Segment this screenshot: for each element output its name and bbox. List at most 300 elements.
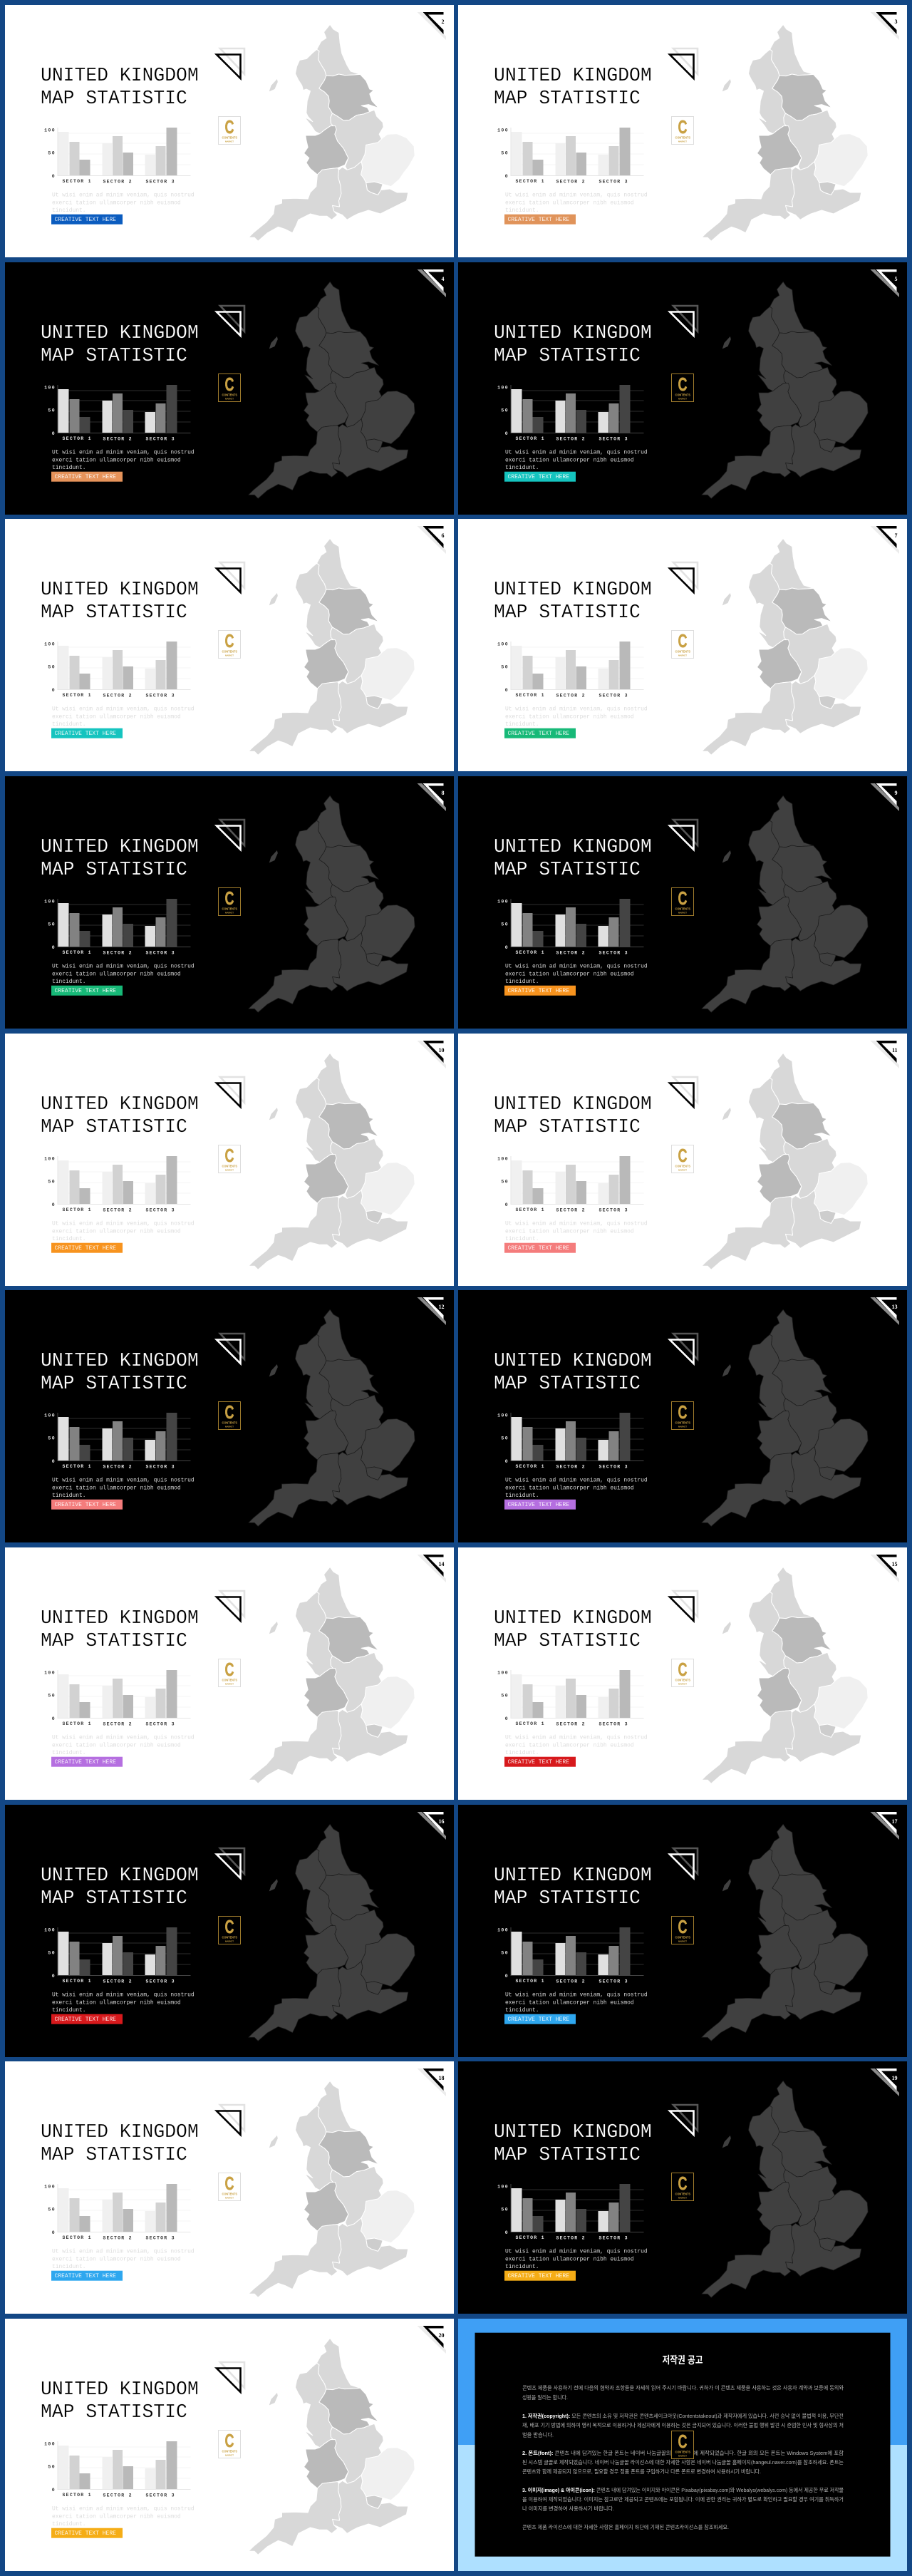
bar chart: SECTOR 2 <box>556 951 585 955</box>
bar chart <box>497 1927 644 1984</box>
text block <box>51 1735 194 1756</box>
title <box>494 1350 652 1394</box>
text block: tincidunt. <box>51 1236 86 1242</box>
button <box>51 215 123 225</box>
notice body text: 3. 이미지(image) & 아이콘(icon): 콘텐츠 내에 담겨있는 이미지와 아이콘은 Pixabay(pixabay.com)와 Webalys(webalys.com) 등에서 제공한 무료 저작물 <box>522 2487 844 2493</box>
text block <box>51 449 194 471</box>
icon: triangles <box>670 1591 698 1621</box>
bar chart: 0 <box>505 431 509 436</box>
icon: triangles <box>217 306 244 336</box>
bar chart: 0 <box>51 174 56 179</box>
bar chart: SECTOR 3 <box>145 1722 174 1726</box>
title: UNITED KINGDOM <box>494 322 652 344</box>
icon: triangles <box>217 1077 244 1107</box>
title: MAP STATISTIC <box>40 88 187 109</box>
bar chart: SECTOR 3 <box>598 1207 628 1212</box>
bar chart: SECTOR 3 <box>145 2236 174 2241</box>
map of England regions <box>702 282 868 498</box>
text block: Ut wisi enim ad minim veniam, quis nostrud <box>51 1992 194 1998</box>
bar chart: 100 <box>497 128 509 133</box>
icon: triangles <box>217 562 244 592</box>
text block <box>51 2506 194 2528</box>
corner marker with page number <box>871 1812 899 1840</box>
text block <box>51 964 194 985</box>
text block: Ut wisi enim ad minim veniam, quis nostrud <box>51 192 194 198</box>
text block: Ut wisi enim ad minim veniam, quis nostrud <box>505 449 648 455</box>
corner marker with page number: 5 <box>895 276 898 282</box>
bar chart: SECTOR 1 <box>516 1721 544 1726</box>
icon: contents logo <box>218 1916 240 1944</box>
map of England regions <box>248 539 415 756</box>
bar chart: SECTOR 1 <box>62 1721 90 1726</box>
icon: contents logo <box>671 373 694 401</box>
bar chart <box>497 642 644 699</box>
text block: tincidunt. <box>505 1750 539 1756</box>
bar chart: SECTOR 2 <box>103 2493 131 2498</box>
bar chart: 50 <box>501 408 509 413</box>
text block: tincidunt. <box>51 2264 86 2270</box>
bar chart: 50 <box>48 151 56 155</box>
title <box>40 2379 198 2423</box>
title: UNITED KINGDOM <box>40 2121 198 2143</box>
bar chart: 0 <box>505 174 509 179</box>
title: MAP STATISTIC <box>494 1373 641 1394</box>
panel: slide 16 (dark, red) <box>4 1805 453 2057</box>
corner marker with page number: 12 <box>438 1304 444 1310</box>
title <box>40 322 198 366</box>
icon: triangles <box>217 1848 244 1878</box>
bar chart: 50 <box>48 2207 56 2212</box>
text block <box>505 192 648 214</box>
text block: exerci tation ullamcorper nibh euismod <box>505 1999 634 2006</box>
corner marker with page number: 16 <box>438 1818 444 1825</box>
corner marker with page number: 7 <box>895 532 898 539</box>
bar chart <box>497 899 644 955</box>
text block: tincidunt. <box>51 2007 86 2014</box>
notice heading: 저작권 공고 <box>663 2354 703 2366</box>
bar chart: SECTOR 2 <box>556 1207 585 1212</box>
map of England regions <box>702 1824 868 2041</box>
button: CREATIVE TEXT HERE <box>54 2016 116 2023</box>
text block: tincidunt. <box>505 2007 539 2014</box>
corner marker with page number <box>871 269 899 297</box>
title: MAP STATISTIC <box>40 1630 187 1652</box>
text block: exerci tation ullamcorper nibh euismod <box>51 200 180 207</box>
text block <box>505 1478 648 1499</box>
map of England regions <box>248 1310 415 1527</box>
bar chart: 50 <box>501 2207 509 2212</box>
panel: slide 7 (light, green) <box>458 519 907 771</box>
title <box>40 1607 198 1652</box>
map of England regions <box>702 2081 868 2298</box>
text block: exerci tation ullamcorper nibh euismod <box>51 971 180 978</box>
button: CREATIVE TEXT HERE <box>54 988 116 994</box>
bar chart: 50 <box>48 1179 56 1184</box>
notice body text: 성원을 알리는 합니다. <box>522 2394 568 2401</box>
icon: contents logo <box>218 1401 240 1430</box>
button <box>51 2271 123 2281</box>
panel: slide 11 (light, salmon) <box>458 1034 907 1286</box>
text block: tincidunt. <box>505 979 539 985</box>
text block: exerci tation ullamcorper nibh euismod <box>505 200 634 207</box>
panel: slide 9 (dark, orange) <box>458 776 907 1029</box>
bar chart: SECTOR 2 <box>103 1207 131 1212</box>
title: UNITED KINGDOM <box>40 836 198 857</box>
title: UNITED KINGDOM <box>494 2121 652 2143</box>
notice body text: 벌을 받습니다. <box>522 2432 554 2438</box>
button: CREATIVE TEXT HERE <box>54 217 116 223</box>
title: MAP STATISTIC <box>494 345 641 366</box>
map of England regions <box>702 795 868 1012</box>
icon: triangles <box>670 1848 698 1878</box>
bar chart: 50 <box>48 408 56 413</box>
corner marker with page number <box>871 1041 899 1068</box>
text block <box>505 1992 648 2014</box>
panel: slide 15 (light, red) <box>458 1547 907 1800</box>
text block: exerci tation ullamcorper nibh euismod <box>505 714 634 721</box>
button: CREATIVE TEXT HERE <box>507 1245 569 1252</box>
title: MAP STATISTIC <box>494 602 641 623</box>
map of England regions <box>248 1824 415 2041</box>
bar chart: SECTOR 2 <box>556 2236 585 2241</box>
bar chart: 100 <box>497 642 509 647</box>
text block: Ut wisi enim ad minim veniam, quis nostrud <box>51 706 194 713</box>
bar chart: 0 <box>505 1202 509 1207</box>
icon: triangles <box>217 48 244 78</box>
bar chart <box>497 1670 644 1726</box>
bar chart: SECTOR 3 <box>145 951 174 955</box>
bar chart: SECTOR 1 <box>516 179 544 184</box>
panel: slide 12 (dark, salmon) <box>4 1290 453 1542</box>
title <box>40 1350 198 1394</box>
bar chart: SECTOR 1 <box>516 1207 544 1212</box>
icon: triangles <box>217 2362 244 2392</box>
button: CREATIVE TEXT HERE <box>507 1502 569 1508</box>
bar chart: 100 <box>497 1413 509 1418</box>
title: MAP STATISTIC <box>494 88 641 109</box>
corner marker with page number: 9 <box>895 790 898 796</box>
bar chart <box>497 128 644 184</box>
bar chart: SECTOR 1 <box>62 1207 90 1212</box>
bar chart: 100 <box>44 1671 56 1675</box>
two-tone blue background <box>458 2319 907 2571</box>
corner marker with page number <box>871 2068 899 2096</box>
button <box>504 1242 576 1252</box>
panel: slide 4 (dark, tan) <box>4 262 453 515</box>
panel: slide 17 (dark, sky blue) <box>458 1805 907 2057</box>
text block: tincidunt. <box>505 1493 539 1499</box>
text block: Ut wisi enim ad minim veniam, quis nostrud <box>505 1478 648 1484</box>
title: UNITED KINGDOM <box>494 1350 652 1371</box>
bar chart: SECTOR 2 <box>103 694 131 699</box>
button <box>504 2014 576 2024</box>
bar chart: 0 <box>505 1974 509 1979</box>
text block: tincidunt. <box>51 1493 86 1499</box>
bar chart: 50 <box>501 151 509 155</box>
bar chart: SECTOR 1 <box>516 1464 544 1469</box>
button: CREATIVE TEXT HERE <box>54 2273 116 2279</box>
bar chart: 100 <box>44 128 56 133</box>
icon: contents logo <box>218 1659 240 1686</box>
map of England regions <box>248 24 415 241</box>
text block: tincidunt. <box>505 465 539 471</box>
bar chart <box>497 2184 644 2241</box>
icon: contents logo <box>671 1916 694 1944</box>
button <box>504 471 576 481</box>
text block <box>51 1992 194 2014</box>
bar chart: 100 <box>44 2185 56 2190</box>
title: UNITED KINGDOM <box>40 1350 198 1371</box>
text block: exerci tation ullamcorper nibh euismod <box>505 1228 634 1235</box>
bar chart: SECTOR 3 <box>598 180 628 184</box>
button <box>51 471 123 481</box>
bar chart <box>497 1156 644 1212</box>
bar chart: 100 <box>44 385 56 390</box>
button <box>51 986 123 996</box>
bar chart: SECTOR 3 <box>145 2493 174 2498</box>
text block: Ut wisi enim ad minim veniam, quis nostrud <box>51 2249 194 2255</box>
text block: Ut wisi enim ad minim veniam, quis nostrud <box>505 192 648 198</box>
corner marker with page number <box>417 1041 446 1068</box>
bar chart: SECTOR 2 <box>103 436 131 441</box>
notice body text: 1. 저작권(copyright): 모든 콘텐츠의 소유 및 저작권은 콘텐츠세이크아웃(Contentstakeout)과 제작자에게 있습니다. 사전 승낙 없이 불법적 이용, 무단전 <box>522 2413 844 2419</box>
button: CREATIVE TEXT HERE <box>507 2273 569 2279</box>
title: MAP STATISTIC <box>494 859 641 880</box>
button: CREATIVE TEXT HERE <box>507 217 569 223</box>
text block <box>51 2249 194 2270</box>
text block: Ut wisi enim ad minim veniam, quis nostrud <box>505 1220 648 1227</box>
bar chart: 0 <box>505 945 509 950</box>
bar chart: SECTOR 3 <box>145 180 174 184</box>
panel: slide 18 (light, sky blue) <box>4 2061 453 2314</box>
button <box>504 728 576 738</box>
button <box>51 2014 123 2024</box>
title: UNITED KINGDOM <box>40 2379 198 2400</box>
bar chart: SECTOR 1 <box>516 2235 544 2240</box>
bar chart: SECTOR 2 <box>103 2236 131 2241</box>
bar chart: 50 <box>48 1436 56 1441</box>
bar chart <box>44 385 190 441</box>
bar chart: SECTOR 2 <box>556 1722 585 1726</box>
bar chart: SECTOR 1 <box>62 2235 90 2240</box>
bar chart: 100 <box>497 2185 509 2190</box>
bar chart: SECTOR 1 <box>62 950 90 955</box>
bar chart: 0 <box>51 2488 56 2493</box>
icon: contents logo <box>671 1659 694 1686</box>
corner marker with page number <box>417 1297 446 1325</box>
bar chart <box>44 1156 190 1212</box>
text block: Ut wisi enim ad minim veniam, quis nostrud <box>51 1735 194 1741</box>
text block: exerci tation ullamcorper nibh euismod <box>51 1485 180 1492</box>
button: CREATIVE TEXT HERE <box>54 2530 116 2537</box>
notice body text: 재, 배포 기기 방법에 의하여 영리 목적으로 이용하거나 제삼자에게 이용하는 것은 금지되어 있습니다. 이러한 불법 행위 발견 시 준엄한 민사 및 형사상의 처 <box>522 2422 844 2428</box>
bar chart: 100 <box>497 1671 509 1675</box>
button: CREATIVE TEXT HERE <box>507 2016 569 2023</box>
text block: tincidunt. <box>505 721 539 728</box>
title <box>494 579 652 623</box>
corner marker with page number <box>417 526 446 554</box>
text block: tincidunt. <box>51 465 86 471</box>
bar chart: 0 <box>51 1716 56 1721</box>
bar chart: 0 <box>51 688 56 693</box>
title <box>494 1093 652 1138</box>
corner marker with page number: 17 <box>892 1818 898 1825</box>
corner marker with page number <box>417 783 446 811</box>
title <box>40 579 198 623</box>
icon: triangles <box>217 1591 244 1621</box>
button <box>51 1757 123 1767</box>
bar chart: SECTOR 3 <box>598 951 628 955</box>
panel: slide 2 (light, blue) <box>4 5 453 257</box>
corner marker with page number: 8 <box>441 790 444 796</box>
bar chart: SECTOR 2 <box>103 1722 131 1726</box>
text block: tincidunt. <box>51 1750 86 1756</box>
map of England regions <box>248 2081 415 2298</box>
button: CREATIVE TEXT HERE <box>54 731 116 737</box>
corner marker with page number: 3 <box>895 19 898 25</box>
bar chart: SECTOR 1 <box>62 693 90 698</box>
title: UNITED KINGDOM <box>494 579 652 600</box>
title <box>40 1093 198 1138</box>
panel: copyright notice <box>458 2319 907 2571</box>
title <box>494 836 652 880</box>
title <box>494 1865 652 1909</box>
title: UNITED KINGDOM <box>40 65 198 86</box>
bar chart: 100 <box>44 1927 56 1932</box>
title: UNITED KINGDOM <box>494 836 652 857</box>
text block: Ut wisi enim ad minim veniam, quis nostrud <box>51 1478 194 1484</box>
text block: tincidunt. <box>505 1236 539 1242</box>
notice body text: 콘텐츠 제품 라이선스에 대한 자세한 사항은 홈페이지 하단에 기재된 콘텐츠라이선스를 참조하세요. <box>522 2524 729 2530</box>
corner marker with page number <box>417 1812 446 1840</box>
bar chart: SECTOR 3 <box>145 694 174 699</box>
corner marker with page number <box>417 269 446 297</box>
title: UNITED KINGDOM <box>494 1607 652 1629</box>
title: UNITED KINGDOM <box>494 1865 652 1886</box>
button: CREATIVE TEXT HERE <box>54 1759 116 1766</box>
corner marker with page number <box>417 2326 446 2354</box>
bar chart: SECTOR 2 <box>556 1979 585 1984</box>
text block: Ut wisi enim ad minim veniam, quis nostrud <box>505 2249 648 2255</box>
title: MAP STATISTIC <box>40 1116 187 1138</box>
bar chart: SECTOR 3 <box>598 2236 628 2241</box>
title: UNITED KINGDOM <box>494 65 652 86</box>
text block: tincidunt. <box>51 979 86 985</box>
corner marker with page number: 19 <box>892 2075 898 2081</box>
text block: tincidunt. <box>505 207 539 214</box>
bar chart: 100 <box>44 2442 56 2446</box>
button <box>51 2528 123 2538</box>
notice body text: 을 이용하여 제작되었습니다. 이미지는 참고로만 제공되고 콘텐츠에는 포함됩니다. 이에 관한 권리는 귀하가 별도로 확인하고 필요할 경우 여기를 취득하거 <box>522 2496 844 2503</box>
icon: triangles <box>217 1334 244 1364</box>
text block: Ut wisi enim ad minim veniam, quis nostrud <box>505 706 648 713</box>
corner marker with page number <box>871 12 899 40</box>
map of England regions <box>702 1567 868 1783</box>
bar chart: 50 <box>48 922 56 927</box>
bar chart: 50 <box>48 1694 56 1698</box>
bar chart: 50 <box>501 1694 509 1698</box>
bar chart: SECTOR 2 <box>103 1465 131 1470</box>
bar chart: 0 <box>505 1459 509 1464</box>
map of England regions <box>702 1053 868 1269</box>
bar chart: 0 <box>51 945 56 950</box>
map of England regions <box>248 1053 415 1269</box>
bar chart: SECTOR 1 <box>516 1979 544 1984</box>
button <box>504 1500 576 1510</box>
notice body text: 콘텐츠 제품을 사용하기 전에 다음의 협약과 조항들을 자세히 읽어 주시기 바랍니다. 귀하가 이 콘텐츠 제품을 사용하는 것은 사용자 계약과 보증에 동의와 <box>522 2385 844 2391</box>
text block: exerci tation ullamcorper nibh euismod <box>51 1228 180 1235</box>
bar chart: 0 <box>51 1459 56 1464</box>
bar chart: SECTOR 3 <box>145 1979 174 1984</box>
bar chart: 50 <box>501 1179 509 1184</box>
icon: triangles <box>217 820 244 850</box>
text block: exerci tation ullamcorper nibh euismod <box>51 714 180 721</box>
panel: slide 20 (light, yellow) <box>4 2319 453 2571</box>
bar chart: SECTOR 3 <box>598 1979 628 1984</box>
text block: Ut wisi enim ad minim veniam, quis nostrud <box>51 1220 194 1227</box>
text block: Ut wisi enim ad minim veniam, quis nostrud <box>51 964 194 969</box>
text block: tincidunt. <box>51 721 86 728</box>
bar chart: SECTOR 3 <box>598 436 628 441</box>
icon: triangles <box>670 820 698 850</box>
bar chart: SECTOR 2 <box>556 1465 585 1470</box>
button: CREATIVE TEXT HERE <box>507 731 569 737</box>
icon: contents logo <box>671 116 694 144</box>
bar chart: SECTOR 1 <box>62 436 90 441</box>
bar chart: SECTOR 3 <box>145 1465 174 1470</box>
icon: triangles <box>670 306 698 336</box>
map of England regions <box>248 1567 415 1783</box>
bar chart: 100 <box>497 1927 509 1932</box>
notice body text: 된 시스템 글꼴로 제작되었습니다. 네이버 나눔글꼴 라이선스에 대한 자세한 사항은 네이버 나눔글꼴 홈페이지(hangeul.naver.com)를 참조하세요. 폰트는 <box>522 2459 844 2466</box>
icon: triangles <box>670 48 698 78</box>
panel: slide 19 (dark, yellow) <box>458 2061 907 2314</box>
bar chart: SECTOR 2 <box>556 180 585 184</box>
bar chart: 100 <box>44 642 56 647</box>
text block: Ut wisi enim ad minim veniam, quis nostrud <box>505 1992 648 1998</box>
title: MAP STATISTIC <box>40 1373 187 1394</box>
button: CREATIVE TEXT HERE <box>507 474 569 480</box>
text block <box>505 449 648 471</box>
bar chart: 0 <box>51 1202 56 1207</box>
title <box>494 2121 652 2165</box>
corner marker with page number <box>871 783 899 811</box>
bar chart <box>44 2441 190 2498</box>
corner marker with page number: 10 <box>438 1047 444 1053</box>
bar chart: 0 <box>505 688 509 693</box>
text block: Ut wisi enim ad minim veniam, quis nostrud <box>505 1735 648 1741</box>
text block: exerci tation ullamcorper nibh euismod <box>51 2513 180 2520</box>
panel: slide 8 (dark, green) <box>4 776 453 1029</box>
bar chart <box>44 2184 190 2241</box>
bar chart <box>497 1413 644 1470</box>
map of England regions <box>702 539 868 756</box>
bar chart: 100 <box>497 1156 509 1161</box>
text block: exerci tation ullamcorper nibh euismod <box>51 457 180 463</box>
title: UNITED KINGDOM <box>40 579 198 600</box>
corner marker with page number <box>871 526 899 554</box>
bar chart: SECTOR 3 <box>145 1207 174 1212</box>
icon: contents logo <box>671 2431 694 2459</box>
text block: exerci tation ullamcorper nibh euismod <box>51 1742 180 1749</box>
bar chart: SECTOR 2 <box>556 436 585 441</box>
title: MAP STATISTIC <box>494 2144 641 2165</box>
notice body text <box>522 2385 844 2530</box>
corner marker with page number <box>417 1555 446 1582</box>
text block: exerci tation ullamcorper nibh euismod <box>505 1485 634 1492</box>
notice body text: 2. 폰트(font): 콘텐츠 내에 담겨있는 한글 폰트는 네이버 나눔글꼴의 저작권 하에 제작되었습니다. 한글 외의 모든 폰트는 Windows System에 포함 <box>522 2450 844 2456</box>
text block: exerci tation ullamcorper nibh euismod <box>505 971 634 978</box>
